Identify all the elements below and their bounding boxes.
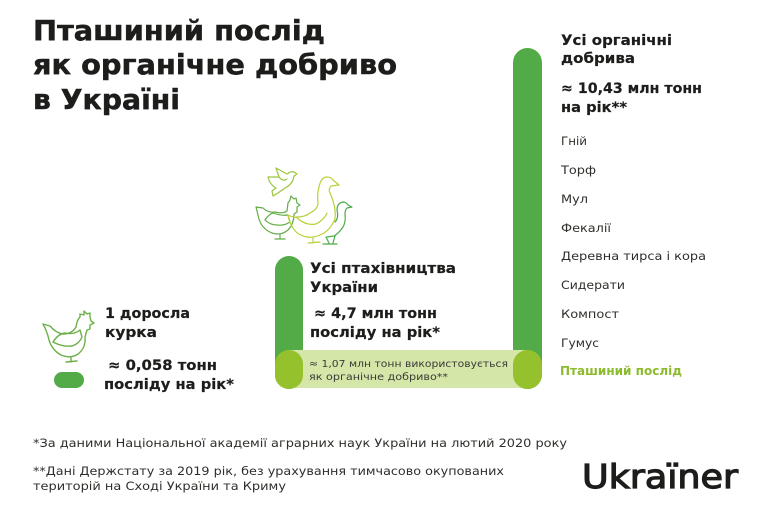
bar: all organic fertilizers <box>513 48 542 389</box>
icon: hen <box>43 311 94 362</box>
text: all organic fertilizers: ≈ 10,43 млн тонн <box>561 81 702 97</box>
text: all poultry farms: України <box>310 280 378 296</box>
list: fertilizer types: Компост <box>561 307 619 321</box>
text: all organic fertilizers <box>561 33 702 116</box>
icon: poultry group <box>256 168 352 244</box>
text: all organic fertilizers: на рік** <box>561 100 627 116</box>
title: Пташиний послід <box>33 14 325 47</box>
text: all poultry farms: ≈ 4,7 млн тонн <box>314 306 437 322</box>
list: fertilizer types: Гній <box>561 134 587 148</box>
text: all organic fertilizers: Усі органічні <box>561 33 672 49</box>
text: one adult hen: курка <box>105 325 157 341</box>
text: all poultry farms: Усі птахівництва <box>310 261 456 277</box>
list: fertilizer types: Сидерати <box>561 278 625 292</box>
icon: dove <box>268 168 297 196</box>
icon: small goose <box>327 202 352 237</box>
icon: small hen <box>256 196 300 234</box>
title: як органічне добриво <box>33 48 397 81</box>
band: share used as organic fertilizer: як органічне добриво** <box>309 371 448 383</box>
logo: Ukraïner: Ukraïner <box>582 457 738 496</box>
band: share used as organic fertilizer <box>275 350 542 389</box>
footnote: National Academy data: *За даними Національної академії аграрних наук України на лютий 2020 року <box>33 436 567 450</box>
list: fertilizer types <box>560 134 706 378</box>
list: fertilizer types: Деревна тирса і кора <box>561 249 706 263</box>
list: fertilizer types: Пташиний послід <box>560 364 682 378</box>
list: fertilizer types: Торф <box>560 163 596 177</box>
text: all poultry farms <box>310 261 456 341</box>
footnote: State Statistics data: **Дані Держстату за 2019 рік, без урахування тимчасово окупованих <box>33 464 504 478</box>
text: one adult hen: ≈ 0,058 тонн <box>108 358 217 374</box>
title <box>33 14 397 116</box>
footnote: State Statistics data <box>33 464 504 493</box>
band: share used as organic fertilizer: ≈ 1,07 млн тонн використовується <box>309 359 508 370</box>
list: fertilizer types: Фекалії <box>561 221 612 235</box>
title: в Україні <box>33 83 180 116</box>
list: fertilizer types: Мул <box>561 192 588 206</box>
icon: large goose <box>288 177 339 237</box>
text: one adult hen: посліду на рік* <box>104 377 234 393</box>
text: all poultry farms: посліду на рік* <box>310 325 440 341</box>
bar: one hen <box>54 372 84 388</box>
text: all organic fertilizers: добрива <box>561 51 635 67</box>
bar: all poultry farms <box>275 256 303 389</box>
footnote: State Statistics data: територій на Сході України та Криму <box>33 479 286 493</box>
text: one adult hen: 1 доросла <box>105 306 190 322</box>
list: fertilizer types: Гумус <box>561 336 599 350</box>
text: one adult hen <box>104 306 234 393</box>
